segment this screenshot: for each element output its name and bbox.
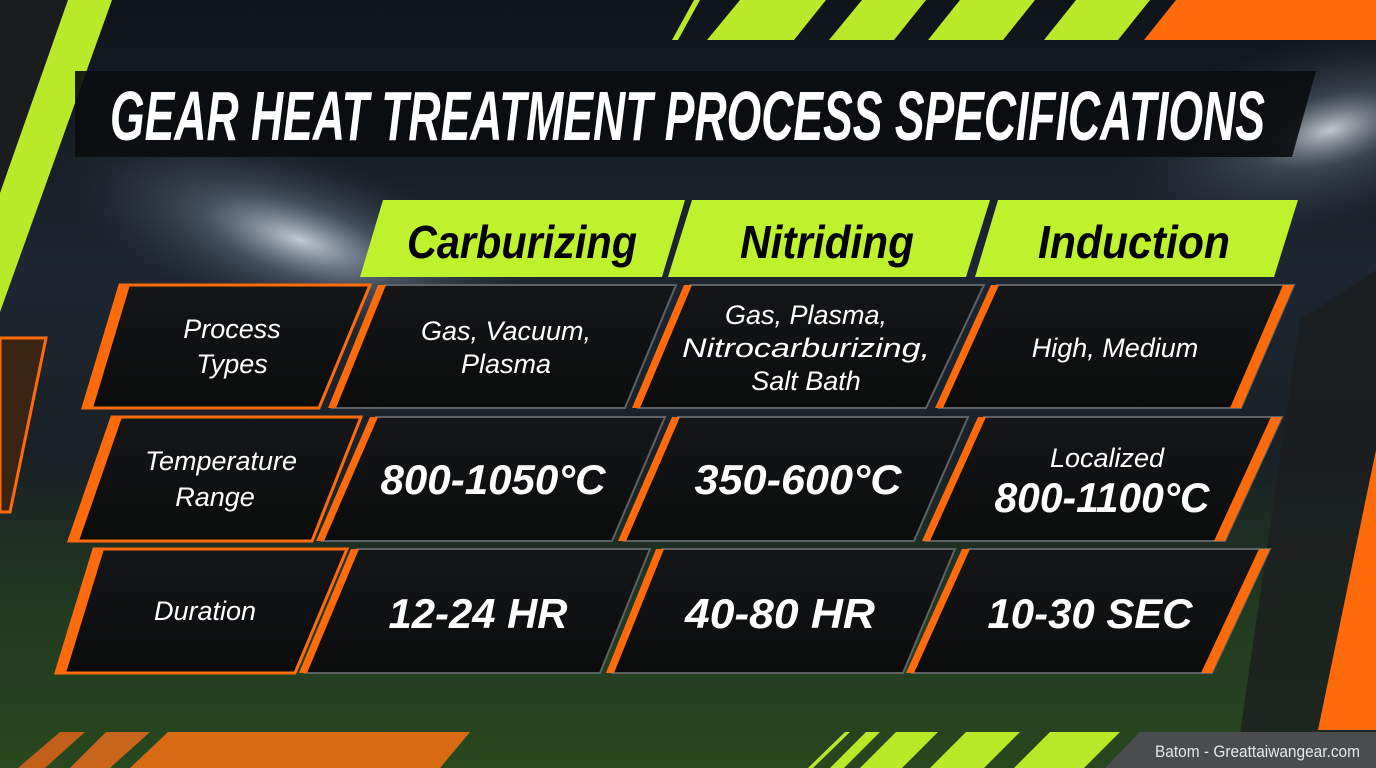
- label cell: Duration: [56, 549, 347, 673]
- cell: nitriding temp: 350-600°C: [694, 456, 902, 503]
- label cell: Process Types: Types: [196, 349, 268, 379]
- cell: nitriding types: [632, 285, 984, 408]
- cell: induction duration: 10-30 SEC: [988, 590, 1193, 637]
- header: Induction: [975, 200, 1298, 277]
- cell: nitriding duration: 40-80 HR: [684, 590, 876, 637]
- decoration: right orange triangle: [1318, 450, 1376, 730]
- header: Carburizing: Carburizing: [407, 216, 637, 268]
- decoration: left lime stripe: [0, 0, 112, 312]
- cell: induction duration: [906, 549, 1270, 673]
- label cell: Temperature Range: Range: [175, 482, 255, 512]
- cell: induction temp: [922, 417, 1282, 541]
- label cell: Process Types: Process: [183, 314, 281, 344]
- header: Induction: Induction: [1038, 216, 1230, 268]
- cell: nitriding types: Gas, Plasma,: [725, 300, 887, 330]
- cell: carburizing types: Plasma: [461, 349, 551, 379]
- header: Nitriding: [668, 200, 990, 277]
- label cell: Temperature Range: Temperature: [145, 446, 297, 476]
- cell: nitriding types: Salt Bath: [751, 366, 861, 396]
- cell: induction types: High, Medium: [1032, 333, 1198, 363]
- header: Nitriding: Nitriding: [740, 216, 914, 268]
- decoration: left orange tab: [0, 338, 46, 512]
- cell: carburizing temp: 800-1050°C: [380, 456, 606, 503]
- cell: nitriding duration: [606, 549, 955, 673]
- cell: induction types: [935, 285, 1294, 408]
- row: Temperature Range: [69, 417, 1282, 541]
- row: Process Types: [83, 285, 1294, 408]
- label cell: Temperature Range: [69, 417, 361, 541]
- cell: carburizing types: Gas, Vacuum,: [421, 316, 591, 346]
- label cell: Duration: Duration: [154, 596, 256, 626]
- cell: nitriding temp: [618, 417, 968, 541]
- label cell: Process Types: [83, 285, 370, 408]
- cell: induction temp: 800-1100°C: [994, 474, 1210, 521]
- row: Duration: [56, 549, 1270, 673]
- footer credit: Batom - Greattaiwangear.com: [1155, 742, 1360, 761]
- cell: carburizing types: [328, 285, 676, 408]
- decoration: bottom lime stripes: [808, 732, 1120, 768]
- decoration: bottom orange strip: [18, 732, 470, 768]
- cell: carburizing duration: [299, 549, 650, 673]
- cell: carburizing temp: [316, 417, 665, 541]
- header: Carburizing: [360, 200, 685, 277]
- cell: nitriding types: Nitrocarburizing,: [682, 333, 930, 363]
- cell: carburizing duration: 12-24 HR: [388, 590, 568, 637]
- footer credit: [1105, 732, 1376, 768]
- decoration: top stripes: [672, 0, 1376, 40]
- cell: induction temp: Localized: [1050, 443, 1165, 473]
